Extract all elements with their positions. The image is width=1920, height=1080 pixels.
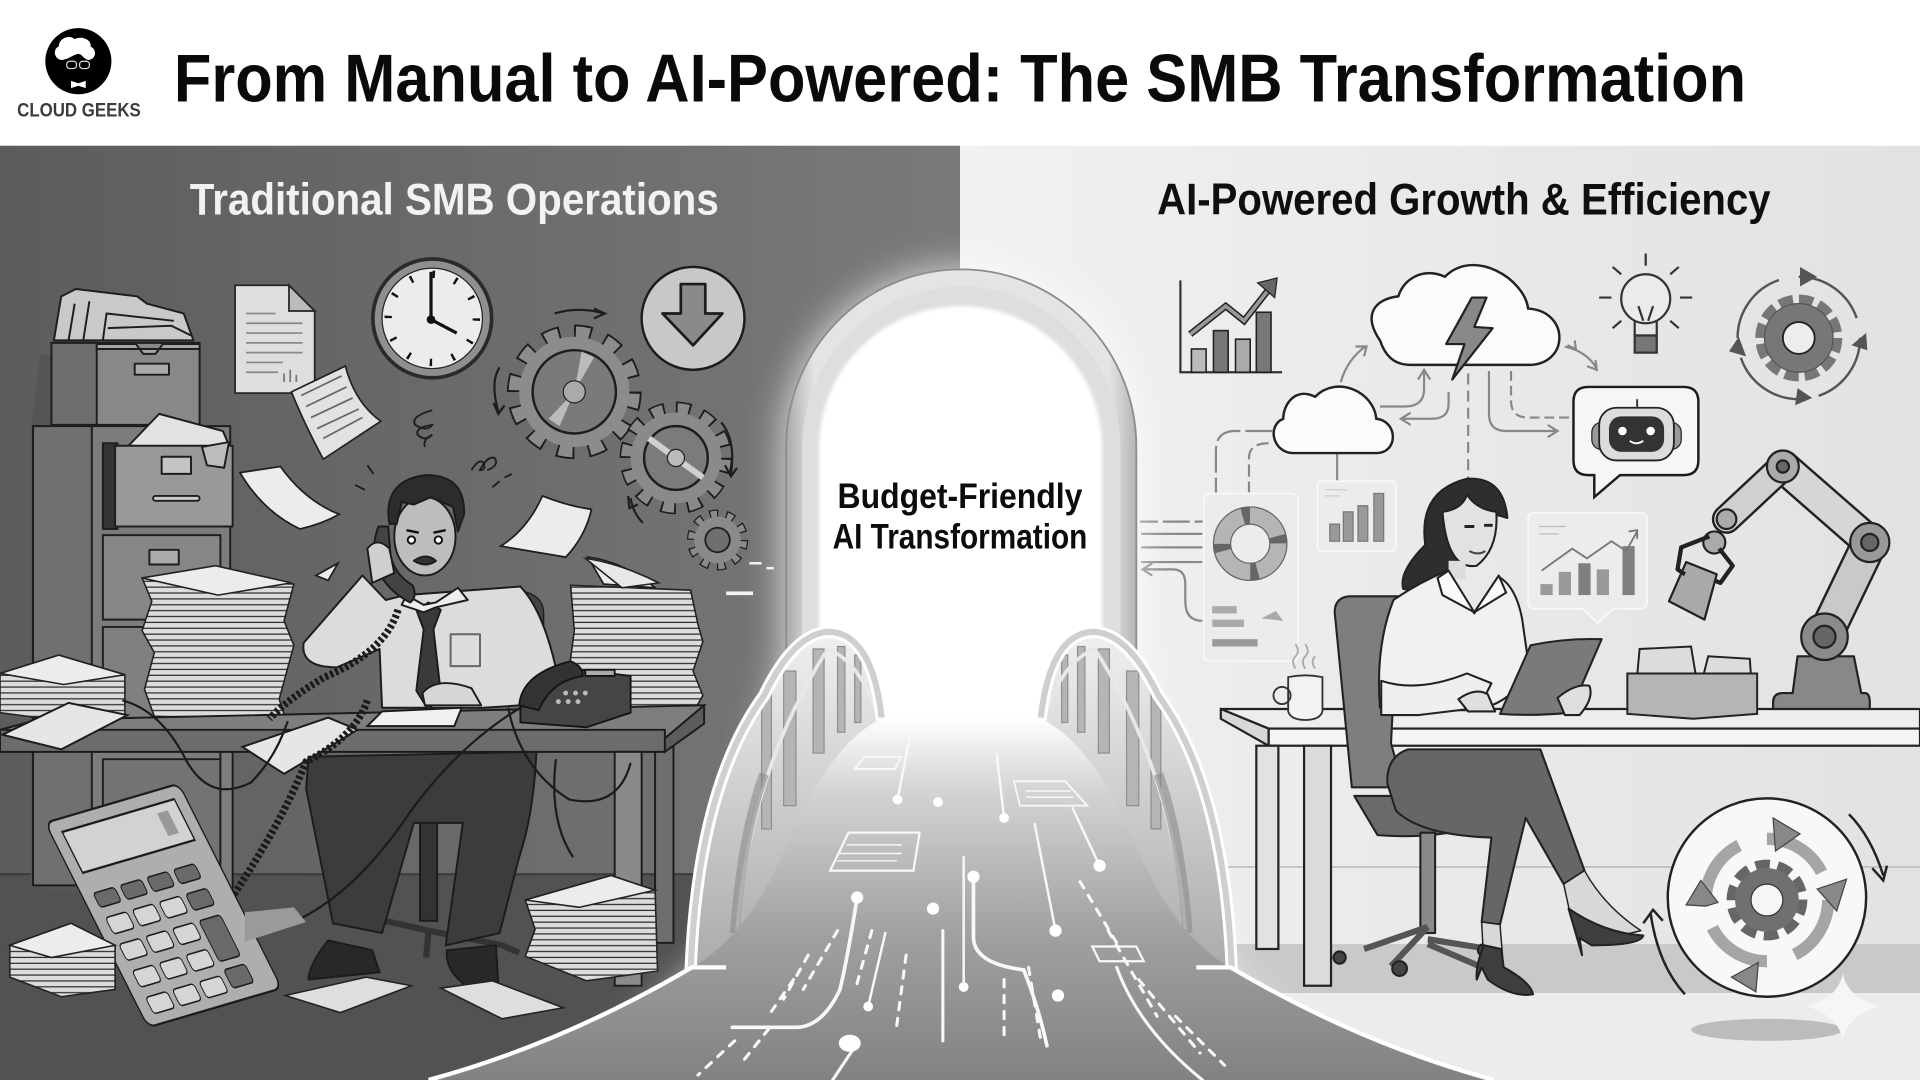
bridge: right railing bbox=[1041, 632, 1232, 982]
icon: process wheel with gear bbox=[1643, 798, 1887, 1041]
woman working on tablet bbox=[1333, 479, 1643, 995]
header band bbox=[0, 0, 1920, 146]
heading: traditional: Traditional SMB Operations bbox=[190, 175, 719, 224]
filing cabinet with drawers bbox=[31, 289, 233, 894]
glow around the portal and bridge bbox=[588, 272, 1332, 1080]
document on wall bbox=[235, 285, 315, 393]
bridge: left railing bbox=[691, 632, 882, 982]
label: budget-friendly AI transformation bbox=[833, 476, 1087, 557]
floor paper stacks and sheets bbox=[10, 876, 658, 1019]
stressed man on the phone bbox=[303, 475, 558, 710]
stress scribbles bbox=[355, 410, 512, 490]
icon: robot chat bubble bbox=[1573, 387, 1698, 497]
heading: AI-powered: AI-Powered Growth & Efficiency bbox=[1157, 175, 1771, 224]
connector lines bbox=[1140, 340, 1597, 621]
coiled phone cords bbox=[122, 610, 631, 934]
icon: down arrow circle bbox=[642, 267, 744, 370]
file box bbox=[1627, 647, 1757, 719]
telephone on desk bbox=[519, 661, 631, 727]
icon: light bulb bbox=[1599, 253, 1692, 353]
title: From Manual to AI-Powered: The SMB Transformation bbox=[174, 42, 1746, 117]
logo: Cloud Geeks: CLOUD GEEKS bbox=[17, 100, 141, 121]
label: budget-friendly AI transformation: AI Transformation bbox=[833, 517, 1087, 557]
panel: traditional background bbox=[0, 146, 960, 1080]
panel: AI-powered background bbox=[960, 146, 1920, 1080]
right desk bbox=[1221, 709, 1920, 986]
wall clock bbox=[371, 257, 493, 380]
icon: broken gears bbox=[493, 309, 743, 566]
label: budget-friendly AI transformation: Budget-Friendly bbox=[838, 476, 1083, 516]
panel: line chart bbox=[1528, 513, 1647, 623]
man seat and legs bbox=[306, 752, 536, 989]
logo: Cloud Geeks bbox=[17, 28, 141, 121]
sparkle mark bbox=[1806, 973, 1880, 1038]
panel: small bar chart bbox=[1318, 481, 1396, 551]
paper stacks on desk bbox=[0, 558, 703, 722]
robotic arm bbox=[1669, 451, 1889, 713]
flying loose papers bbox=[240, 467, 655, 588]
man chair back bbox=[516, 590, 544, 661]
icon: growth chart bbox=[1180, 278, 1282, 372]
icon: large cloud with lightning bbox=[1372, 265, 1559, 380]
transition particles bbox=[726, 562, 774, 595]
icon: small cloud bbox=[1274, 387, 1393, 453]
desk with legs bbox=[0, 703, 704, 986]
panel: donut chart dashboard bbox=[1204, 493, 1298, 661]
flying paper with lines bbox=[291, 366, 381, 459]
road circuit traces and nodes bbox=[698, 724, 1224, 1080]
icon: gear with circular arrows bbox=[1729, 267, 1867, 405]
glowing portal arch bbox=[786, 269, 1136, 735]
calculator bbox=[45, 784, 282, 1027]
coffee cup bbox=[1273, 644, 1322, 720]
bridge: digital road deck bbox=[429, 718, 1494, 1080]
